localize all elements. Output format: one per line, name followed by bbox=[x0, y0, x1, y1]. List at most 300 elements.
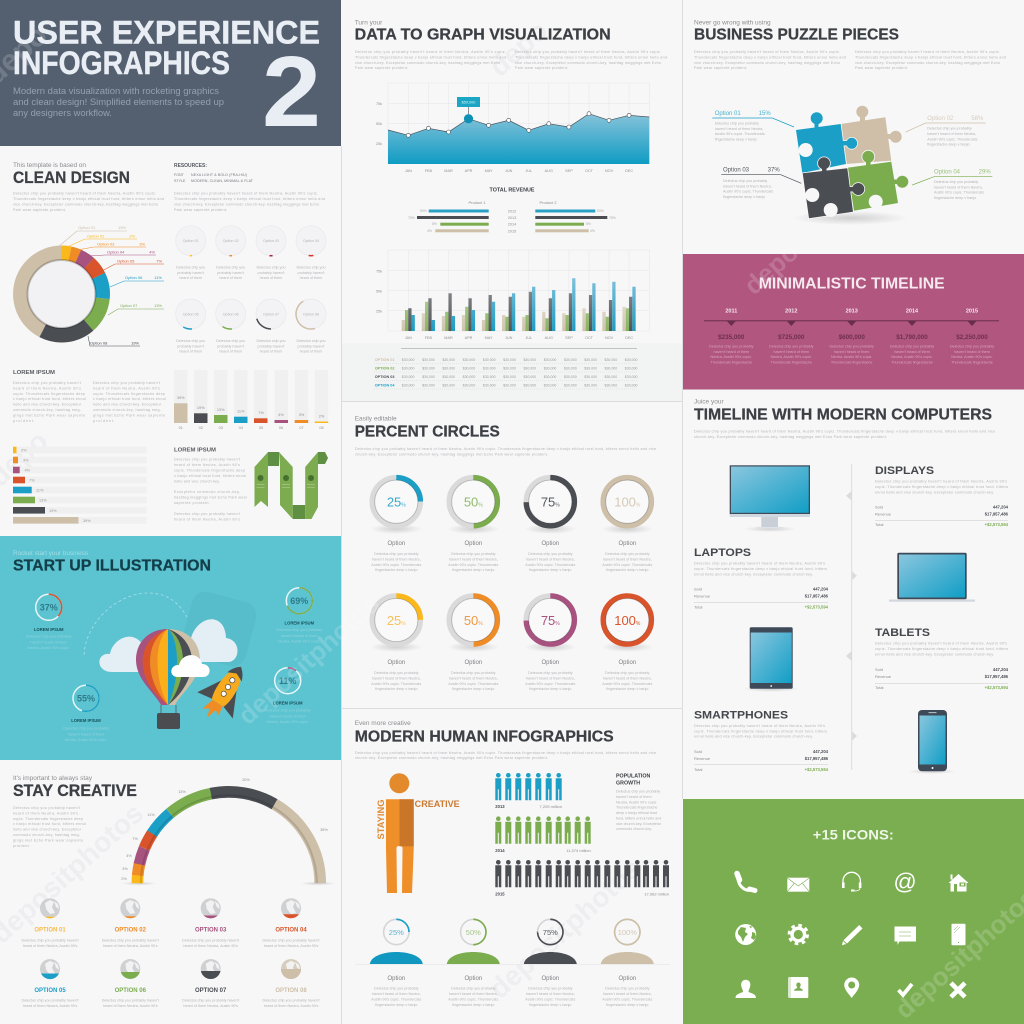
percent descriptions: Austin 90's cupiz. Thundercats bbox=[371, 563, 421, 567]
percent descriptions: haven't heard of them Neutra, bbox=[526, 558, 575, 562]
lorem ipsum text columns: LOREM IPSUM bbox=[13, 370, 55, 376]
start up heading bbox=[13, 550, 211, 574]
donut label text: 19% bbox=[131, 340, 139, 346]
vertical bar chart: 06 bbox=[279, 426, 283, 430]
lorem ipsum text columns: hello and vice church-key. Exceptetur bbox=[13, 403, 82, 407]
total revenue chart: 50% bbox=[420, 209, 427, 213]
stat 11%: LOREM IPSUM bbox=[273, 700, 303, 706]
lorem ipsum ribbon text: Exceptetur commodo church-key, bbox=[174, 490, 240, 494]
panel: minimalistic timeline bbox=[683, 254, 1024, 390]
displays block bbox=[875, 465, 1009, 527]
horizontal bar chart: 11% bbox=[36, 488, 44, 492]
text: depo bbox=[483, 15, 554, 82]
percent descriptions: fingerstache deep v banjo bbox=[529, 568, 571, 572]
smartphones block: Delectus chip you probably haven't heard of them Neutra, Austin 90's bbox=[694, 724, 825, 728]
donut label text: Option 05 bbox=[117, 258, 135, 264]
population growth note: Thundercats fingerstache bbox=[616, 806, 658, 810]
grouped bar chart: APR bbox=[465, 336, 473, 340]
area chart: DEC bbox=[625, 169, 633, 173]
timeline years bbox=[725, 308, 978, 314]
percent values bbox=[387, 494, 641, 628]
small circle labels bbox=[176, 239, 326, 354]
population row labels bbox=[495, 804, 669, 896]
percent descriptions: Austin 90's cupiz. Thundercats bbox=[448, 682, 498, 686]
percent descriptions: Delectus chip you probably bbox=[528, 552, 573, 556]
total revenue chart: 4% bbox=[427, 229, 432, 233]
icon: address book bbox=[788, 977, 808, 998]
clean design intro text: Delectus chip you probably haven't heard of them Neutra, Austin 90's cupiz. bbox=[13, 192, 156, 196]
front cloud bbox=[171, 655, 210, 677]
population row labels: 7,205 million bbox=[540, 804, 562, 809]
donut label text: Option 08 bbox=[90, 340, 108, 346]
icon: pencil bbox=[842, 925, 862, 945]
data intro text: Delectus chip you probably haven't heard of them Neutra, Austin 90's cupiz. bbox=[515, 50, 661, 54]
percent descriptions: fingerstache deep v banjo bbox=[529, 687, 571, 691]
text: depositphotos bbox=[232, 588, 385, 730]
percent values: 75% bbox=[541, 613, 560, 628]
small circle labels: heard of them bbox=[300, 276, 322, 280]
human intro text: church-key. Exceptetur commodo church-key, hashtag meggings met Echo Park wear sapiente proident. bbox=[355, 756, 548, 760]
vertical bar chart: 2% bbox=[319, 414, 325, 418]
data intro text: Park wear sapiente proident. bbox=[515, 66, 568, 70]
timeline descriptions: Delectus chip you probably bbox=[950, 344, 994, 348]
computers intro text: church-key. Exceptetur commodo church-key, hashtag meggings met Echo Park wear sapiente proident. bbox=[694, 435, 887, 439]
option descriptions: heard of them Neutra, Austin 90's bbox=[23, 1004, 77, 1008]
puzzle heading: BUSINESS PUZZLE PIECES bbox=[694, 26, 899, 44]
total revenue chart: Product 1 bbox=[468, 200, 486, 205]
person captions: Option bbox=[618, 976, 636, 982]
lorem ipsum text columns: proident. bbox=[13, 419, 35, 423]
grouped bar chart: 75k bbox=[376, 270, 382, 274]
percent descriptions: Delectus chip you probably bbox=[374, 552, 419, 556]
panel: business puzzle pieces bbox=[694, 20, 1006, 225]
small circle labels: Delectus chip you bbox=[256, 266, 286, 270]
callout option 03: Austin 90's cupiz. Thundercats bbox=[723, 190, 773, 194]
percent descriptions: fingerstache deep v banjo bbox=[452, 687, 494, 691]
small circle arcs bbox=[174, 224, 329, 332]
header title bbox=[13, 14, 320, 81]
data intro text bbox=[355, 50, 667, 70]
person descriptions bbox=[371, 986, 652, 1007]
area chart: AUG bbox=[545, 169, 553, 173]
lorem ipsum text columns: heard of them Neutra, Austin 90's bbox=[13, 386, 81, 390]
panel: data to graph bbox=[342, 20, 682, 401]
total revenue chart: 75% bbox=[408, 216, 415, 220]
area chart: FEB bbox=[425, 169, 433, 173]
option descriptions: Delectus chip you probably haven't bbox=[21, 938, 79, 942]
data table: $30,000 $30,000 $30,000 $30,000 $30,000 $30,000 $30,000 $30,000 $30,000 $30,000 $30,000 $30,000 bbox=[402, 366, 638, 370]
area chart: MAY bbox=[485, 169, 493, 173]
donut label text: Option 02 bbox=[87, 234, 105, 238]
small circle labels: heard of them bbox=[260, 276, 282, 280]
percent values: 50% bbox=[464, 613, 483, 628]
option labels: OPTION 08 bbox=[275, 988, 307, 994]
percent descriptions: haven't heard of them Neutra, bbox=[449, 558, 498, 562]
person descriptions: Delectus chip you probably bbox=[374, 986, 419, 990]
semicircle chart: 7% bbox=[132, 837, 138, 841]
percent captions: Option bbox=[387, 660, 405, 666]
stat 55%: Neutra, Austin 90's cupiz. bbox=[65, 738, 107, 742]
data table: $30,000 $30,000 $30,000 $30,000 $30,000 $30,000 $30,000 $30,000 $30,000 $30,000 $30,000 $30,000 bbox=[402, 384, 638, 388]
small circle labels: Delectus chip you bbox=[216, 339, 245, 343]
data table bbox=[342, 343, 682, 401]
option descriptions: heard of them Neutra, Austin 90's bbox=[103, 1004, 158, 1008]
percent values: 75% bbox=[541, 494, 560, 510]
vertical bar chart: 11% bbox=[237, 410, 245, 414]
horizontal bar chart bbox=[13, 447, 147, 524]
icon: map pin bbox=[844, 978, 859, 998]
timeline descriptions: Neutra, Austin 90's cupiz. bbox=[771, 355, 812, 359]
icon: chat bubble bbox=[894, 926, 916, 945]
timeline years: 2011 bbox=[725, 308, 737, 314]
panel: icons bbox=[683, 799, 1024, 1024]
option descriptions: heard of them Neutra, Austin 90's bbox=[264, 1004, 318, 1008]
small circle labels: Option 03 bbox=[263, 239, 279, 243]
data table: OPTION 02 bbox=[375, 366, 395, 370]
timeline descriptions: Neutra, Austin 90's cupiz. bbox=[891, 355, 933, 359]
donut label text: 4% bbox=[149, 250, 155, 254]
back clouds bbox=[99, 619, 237, 672]
donut labels bbox=[58, 231, 164, 346]
population row labels: 2015 bbox=[495, 892, 505, 896]
option labels bbox=[34, 928, 307, 994]
person stat rings bbox=[384, 919, 640, 945]
resources text: vice church-key. Exceptetur commodo church-key, hashtag meggings met Echo bbox=[174, 202, 319, 206]
callout option 04: 29% bbox=[979, 170, 991, 176]
small circle labels: Delectus chip you bbox=[216, 266, 245, 270]
header subtitle: any designers workflow. bbox=[13, 108, 112, 119]
stay creative text: proident. bbox=[13, 844, 30, 848]
panel: timeline with modern computers bbox=[694, 398, 1009, 774]
callout option 02: Austin 90's cupiz. Thundercats bbox=[927, 137, 977, 141]
percent values: 25% bbox=[387, 613, 406, 628]
small circle labels: heard of them bbox=[179, 350, 202, 354]
lorem ipsum ribbon text: Delectus chip you probably haven't bbox=[174, 458, 240, 462]
callout option 01 bbox=[712, 111, 794, 142]
displays block: Total bbox=[875, 522, 884, 527]
data heading: DATA TO GRAPH VISUALIZATION bbox=[355, 26, 611, 44]
grouped bar chart: NOV bbox=[605, 336, 614, 340]
puzzle intro text: vice church-key. Exceptetur commodo church-key, hashtag meggings met Echo bbox=[694, 61, 840, 65]
donut label text: Option 01 bbox=[78, 225, 96, 230]
semicircle chart bbox=[100, 755, 358, 1012]
start up heading: Rocket start your business bbox=[13, 550, 88, 557]
vertical bar chart: 19% bbox=[197, 406, 205, 410]
phone icon bbox=[908, 710, 956, 774]
semicircle chart: 11% bbox=[147, 813, 155, 817]
human figure: CREATIVE bbox=[415, 799, 460, 809]
person descriptions: Delectus chip you probably bbox=[605, 986, 650, 990]
tablets block bbox=[875, 627, 1009, 690]
puzzle intro text: Thundercats fingerstache deep v banjo ethical trust fund, bitters ennui hello and bbox=[855, 56, 1006, 60]
person captions: Option bbox=[387, 976, 405, 982]
area chart: SEP bbox=[565, 169, 573, 173]
option descriptions: Delectus chip you probably haven't bbox=[182, 938, 239, 942]
person stat values: 100% bbox=[618, 928, 637, 937]
stat 69%: 69% bbox=[290, 596, 308, 606]
option descriptions: Delectus chip you probably haven't bbox=[102, 938, 159, 942]
panel: clean design bbox=[4, 162, 329, 524]
laptops block: +$2,573,594 bbox=[805, 604, 829, 610]
total revenue chart: 75% bbox=[609, 216, 616, 220]
grouped bar chart: JUL bbox=[525, 336, 532, 340]
human figure bbox=[376, 773, 460, 893]
percent descriptions: haven't heard of them Neutra, bbox=[526, 676, 575, 680]
timeline years: 2015 bbox=[966, 308, 978, 314]
timeline descriptions: haven't heard of them bbox=[954, 350, 990, 354]
small circle rings bbox=[176, 226, 326, 329]
lorem ipsum ribbon text: cupiz. Thundercats fingerstache deep bbox=[174, 468, 245, 472]
small circle labels: Delectus chip you bbox=[176, 339, 205, 343]
data table: $30,000 $30,000 $30,000 $30,000 $30,000 $30,000 $30,000 $30,000 $30,000 $30,000 $30,000 $30,000 bbox=[402, 358, 638, 362]
callout option 04: Option 04 bbox=[934, 170, 961, 176]
option labels: OPTION 01 bbox=[34, 928, 66, 934]
population growth note: commodo church-key. bbox=[616, 827, 652, 831]
people row 2013 bbox=[495, 773, 562, 800]
puzzle pieces bbox=[796, 106, 908, 218]
tablets block: cupiz. Thundercats fingerstache deep v banjo ethical trust fund, bitters bbox=[875, 647, 1008, 651]
resources block: FONT bbox=[174, 173, 185, 177]
stat 11%: Delectus chip you probably bbox=[265, 708, 311, 712]
option descriptions: Delectus chip you probably haven't bbox=[21, 998, 79, 1002]
tablets block: TABLETS bbox=[875, 627, 930, 639]
timeline descriptions: haven't heard of them bbox=[834, 350, 869, 354]
lorem ipsum text columns: commodo church-key, hashtag meg- bbox=[93, 408, 162, 412]
donut label text: Option 07 bbox=[120, 303, 138, 308]
smartphones block: +$2,573,594 bbox=[805, 767, 829, 772]
stay creative heading: It's important to always stay bbox=[13, 775, 93, 782]
small circle labels: Option 08 bbox=[303, 312, 319, 316]
vertical bar chart: 4% bbox=[278, 413, 284, 417]
stay creative text: commodo church-key, hashtag meg- bbox=[13, 833, 81, 837]
stat 55%: LOREM IPSUM bbox=[71, 718, 101, 723]
big number 2: 2 bbox=[262, 36, 321, 148]
laptops block: 447,204 bbox=[813, 586, 829, 592]
puzzle intro text: Thundercats fingerstache deep v banjo ethical trust fund, bitters ennui hello and bbox=[694, 56, 846, 60]
option descriptions: heard of them Neutra, Austin 90's bbox=[23, 944, 77, 948]
horizontal bar chart: 19% bbox=[49, 509, 57, 513]
timeline amounts: $235,000 bbox=[718, 334, 745, 341]
timeline descriptions: Delectus chip you probably bbox=[709, 344, 754, 348]
data table: $30,000 $30,000 $30,000 $30,000 $30,000 $30,000 $30,000 $30,000 $30,000 $30,000 $30,000 $30,000 bbox=[402, 375, 638, 379]
semicircle chart: 4% bbox=[126, 854, 132, 858]
circle shadows bbox=[370, 524, 653, 652]
person descriptions: fingerstache deep v banjo bbox=[375, 1003, 417, 1007]
panel: header bbox=[0, 0, 341, 148]
total revenue chart: TOTAL REVENUE bbox=[490, 188, 535, 194]
laptop icon bbox=[889, 553, 975, 602]
laptops block: Total bbox=[694, 604, 703, 610]
stat 69%: LOREM IPSUM bbox=[285, 620, 315, 626]
data intro text: Thundercats fingerstache deep v banjo ethical trust fund, bitters ennui hello and bbox=[515, 56, 667, 60]
timeline years: 2013 bbox=[846, 308, 858, 314]
donut label text bbox=[78, 225, 162, 346]
data table: OPTION 04 bbox=[375, 384, 395, 388]
percent arcs bbox=[372, 478, 652, 644]
person descriptions: haven't heard of them Neutra, bbox=[372, 992, 421, 996]
human figure: STAYING bbox=[376, 800, 386, 840]
percent rings bbox=[372, 478, 652, 644]
text: depo bbox=[738, 237, 804, 300]
header title: INFOGRAPHICS bbox=[13, 45, 230, 81]
data table: OPTION 01 bbox=[375, 358, 395, 362]
percent descriptions: Austin 90's cupiz. Thundercats bbox=[448, 563, 498, 567]
smartphones block: 447,204 bbox=[813, 749, 829, 754]
icon: phone bbox=[737, 874, 755, 890]
stat 37%: Delectus chip you probably bbox=[26, 634, 72, 638]
percent descriptions: Delectus chip you probably bbox=[374, 671, 419, 675]
small circle labels: heard of them bbox=[219, 350, 242, 354]
percent descriptions: haven't heard of them Neutra, bbox=[372, 558, 421, 562]
timeline years: 2012 bbox=[785, 308, 797, 314]
percent values: 100% bbox=[614, 613, 641, 628]
people row 2015 bbox=[495, 860, 669, 887]
small circle labels: Delectus chip you bbox=[176, 266, 205, 270]
person descriptions: fingerstache deep v banjo bbox=[452, 1003, 494, 1007]
vertical bar chart: 05 bbox=[259, 426, 263, 430]
option descriptions bbox=[21, 938, 320, 1008]
total revenue chart: 50% bbox=[597, 209, 604, 213]
semicircle chart: 3% bbox=[122, 867, 128, 871]
horizontal bar chart: 2% bbox=[21, 448, 27, 452]
callout option 02: Delectus chip you probably bbox=[927, 126, 972, 130]
panel: percent circles bbox=[355, 416, 656, 691]
callout option 04 bbox=[912, 170, 992, 200]
smartphones block: Revenue bbox=[694, 756, 711, 761]
option labels: OPTION 06 bbox=[115, 988, 147, 994]
smartphones block: Sold bbox=[694, 749, 702, 754]
percent descriptions: fingerstache deep v banjo bbox=[452, 568, 494, 572]
callout option 02 bbox=[906, 116, 986, 147]
tablet icon bbox=[743, 627, 799, 692]
stat 55%: haven't heard of them bbox=[68, 732, 104, 736]
area chart: NOV bbox=[605, 169, 614, 173]
green ribbon bbox=[254, 452, 328, 519]
percent values: 25% bbox=[387, 494, 406, 510]
donut label text: Option 06 bbox=[125, 275, 143, 280]
timeline descriptions: haven't heard of them bbox=[714, 350, 749, 354]
timeline descriptions: Thundercats fingerstache bbox=[770, 360, 812, 364]
semicircle chart: 39% bbox=[320, 828, 328, 832]
small circle labels: Option 06 bbox=[223, 312, 239, 316]
option descriptions: Delectus chip you probably haven't bbox=[182, 998, 239, 1002]
laptops block: ennui hello and vice church-key. Exceptetur commodo church-key. bbox=[694, 572, 813, 576]
vertical bar chart: 07 bbox=[299, 426, 304, 430]
horizontal bar chart: 39% bbox=[83, 519, 91, 523]
timeline amounts bbox=[718, 334, 988, 341]
computers intro text bbox=[694, 430, 995, 439]
data heading: Turn your bbox=[355, 20, 383, 26]
timeline descriptions: Delectus chip you probably bbox=[769, 344, 814, 348]
percent intro text: church-key. Exceptetur commodo church-key, hashtag meggings met Echo Park wear sapiente proident. bbox=[355, 452, 548, 456]
icon: headset bbox=[842, 872, 861, 892]
donut label text: 19% bbox=[118, 225, 126, 230]
person captions bbox=[387, 976, 636, 982]
panel: start up illustration bbox=[0, 536, 341, 760]
percent descriptions: fingerstache deep v banjo bbox=[375, 568, 417, 572]
stat 69%: Neutra, Austin 90's cupiz. bbox=[278, 640, 321, 644]
population growth note: Delectus chip you probably bbox=[616, 790, 660, 794]
person descriptions: Austin 90's cupiz. Thundercats bbox=[448, 998, 498, 1002]
start up heading: START UP ILLUSTRATION bbox=[13, 558, 211, 574]
timeline descriptions: haven't heard of them bbox=[894, 350, 930, 354]
area chart: MAR bbox=[444, 169, 453, 173]
inner ring outlines bbox=[375, 480, 649, 642]
percent descriptions: fingerstache deep v banjo bbox=[606, 687, 648, 691]
stat 55% bbox=[63, 685, 109, 742]
callout option 04: Austin 90's cupiz. Thundercats bbox=[934, 191, 984, 195]
area chart: OCT bbox=[585, 169, 594, 173]
callout option 03: fingerstache deep v banjo bbox=[723, 195, 765, 199]
callout option 03: haven't heard of them Neutra, bbox=[723, 184, 772, 188]
total revenue chart bbox=[408, 188, 616, 234]
timeline descriptions bbox=[709, 344, 994, 364]
population growth note: haven't heard of them bbox=[616, 795, 652, 799]
resources block: MODERN, CLEAN, MINIMAL & FLAT bbox=[191, 179, 254, 183]
stay creative heading: STAY CREATIVE bbox=[13, 782, 137, 800]
stay creative text: cupiz. Thundercats fingerstache deep bbox=[13, 817, 83, 821]
resources block: NEXA LIGHT & BOLD (FRA-HIU) bbox=[191, 173, 247, 177]
icon: at sign: @ bbox=[893, 868, 917, 894]
clean design intro text: Park wear sapiente proident. bbox=[13, 208, 66, 212]
lorem ipsum ribbon text: LOREM IPSUM bbox=[174, 448, 216, 454]
callout option 01: fingerstache deep v banjo bbox=[715, 138, 757, 142]
option descriptions: heard of them Neutra, Austin 90's bbox=[103, 944, 158, 948]
population growth note: fund, bitters ennui hello and bbox=[616, 816, 661, 820]
smartphones block: cupiz. Thundercats fingerstache deep v banjo ethical trust fund, bitters bbox=[694, 729, 827, 733]
person stat arcs bbox=[384, 919, 640, 945]
percent descriptions: Austin 90's cupiz. Thundercats bbox=[525, 563, 575, 567]
displays block: cupiz. Thundercats fingerstache deep v banjo ethical trust fund, bitters bbox=[875, 485, 1008, 489]
vertical bar chart: 02 bbox=[199, 426, 203, 430]
person descriptions: Austin 90's cupiz. Thundercats bbox=[371, 998, 421, 1002]
population row labels: 2014 bbox=[495, 848, 505, 853]
lorem ipsum ribbon text: Delectus chip you probably haven't bbox=[174, 512, 240, 516]
vertical bar chart: 3% bbox=[299, 413, 305, 417]
small circle labels: probably haven't bbox=[298, 344, 324, 348]
donut label text: 13% bbox=[154, 303, 162, 308]
lorem ipsum text columns: Delectus chip you probably haven't bbox=[13, 381, 81, 385]
vertical bar chart bbox=[174, 370, 328, 430]
percent descriptions: Delectus chip you probably bbox=[451, 671, 496, 675]
puzzle intro text: vice church-key. Exceptetur commodo church-key, hashtag meggings met Echo bbox=[855, 61, 1000, 65]
population row labels: 17,962 million bbox=[644, 892, 669, 896]
population growth note: vice church-key. Exceptetur bbox=[616, 822, 662, 826]
small circle labels: probably haven't bbox=[217, 271, 244, 275]
clean design intro text: vice church-key. Exceptetur commodo church-key, hashtag meggings met Echo bbox=[13, 202, 158, 206]
callout option 01: Delectus chip you probably bbox=[715, 122, 759, 126]
icon: gear bbox=[789, 925, 808, 944]
percent captions: Option bbox=[464, 541, 482, 547]
grouped bar chart: 50k bbox=[376, 290, 382, 294]
percent descriptions: Austin 90's cupiz. Thundercats bbox=[525, 682, 575, 686]
population row labels: 2013 bbox=[495, 804, 505, 809]
stat 69% bbox=[277, 588, 322, 644]
backdrop shape bbox=[179, 589, 259, 669]
stat 11%: haven't heard of them bbox=[269, 714, 306, 718]
grouped bar chart: JUN bbox=[505, 336, 513, 340]
small circle labels: Delectus chip you bbox=[256, 339, 286, 343]
person stat values: 50% bbox=[466, 928, 481, 937]
clean design heading: This template is based on bbox=[13, 162, 86, 169]
icon: house bbox=[948, 874, 968, 892]
percent descriptions: Austin 90's cupiz. Thundercats bbox=[602, 563, 652, 567]
header subtitle bbox=[13, 86, 224, 119]
timeline amounts: $2,250,000 bbox=[956, 334, 988, 341]
stat 37%: LOREM IPSUM bbox=[34, 627, 64, 632]
callout option 03: Option 03 bbox=[723, 168, 750, 174]
lorem ipsum text columns: hello and vice church-key. Exceptetur bbox=[93, 403, 162, 407]
